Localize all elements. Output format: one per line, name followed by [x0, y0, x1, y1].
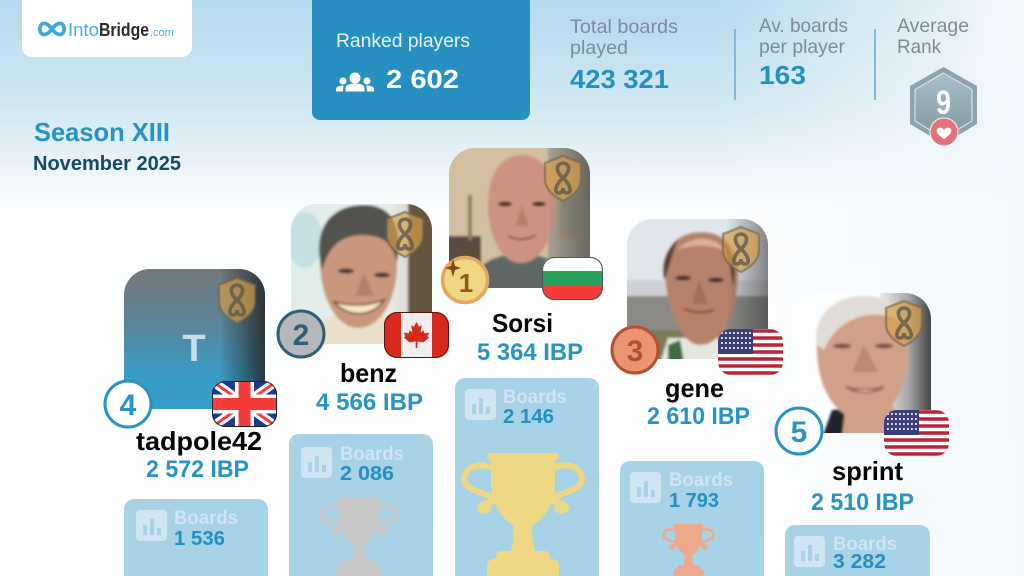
player name: sprint — [832, 456, 903, 486]
stat: total boards — [570, 16, 678, 94]
player name: tadpole42 — [136, 426, 262, 456]
stat: total boards: Total boards — [570, 16, 678, 38]
icon: gold trophy — [464, 453, 582, 576]
icon: silver trophy — [322, 498, 396, 576]
flag: United Kingdom — [212, 381, 277, 427]
boards panel — [620, 461, 764, 576]
rank badge 1 — [442, 258, 488, 302]
avatar — [124, 269, 265, 409]
stat: average boards: Av. boards — [759, 15, 848, 37]
boards panel — [785, 525, 930, 576]
rank badge 2 — [278, 311, 324, 357]
stat: average boards: per player — [759, 36, 845, 58]
IBP score: 2 572 IBP — [146, 456, 249, 483]
label: ranked players: Ranked players — [336, 30, 470, 52]
photo — [627, 219, 768, 359]
rank badge 1: 1 — [459, 268, 473, 298]
icon: bronze trophy — [664, 524, 713, 576]
panel: ranked players — [312, 0, 530, 120]
stat: total boards: played — [570, 37, 628, 59]
rank badge 4: 4 — [120, 389, 137, 422]
stat: total boards: 423 321 — [570, 64, 669, 94]
boards panel: Boards — [340, 444, 404, 465]
flag: United States — [884, 410, 949, 456]
boards panel — [455, 378, 599, 576]
rank badge 3: 3 — [627, 335, 643, 368]
avatar initial: T — [182, 328, 206, 370]
boards panel: Boards — [503, 387, 567, 408]
flag: United States — [718, 329, 783, 375]
player card: gene — [612, 215, 783, 576]
rank badge 5: 5 — [791, 416, 807, 449]
icon: shield badge — [387, 212, 423, 257]
value: ranked players: 2 602 — [386, 64, 459, 94]
rank badge 5 — [776, 408, 822, 454]
IBP score: 5 364 IBP — [477, 339, 583, 366]
boards panel — [289, 434, 433, 576]
logo card — [22, 0, 192, 57]
icon: rank hexagon: 9 — [936, 84, 951, 122]
icon: infinity logo — [40, 24, 64, 34]
stat: average boards — [759, 15, 848, 90]
icon: shield badge — [219, 278, 255, 323]
photo — [449, 148, 590, 288]
rank badge 4 — [105, 381, 151, 427]
heading: date: November 2025 — [33, 153, 181, 175]
icon: people — [336, 72, 374, 92]
player card: benz — [278, 200, 449, 576]
logo text: Bridge — [99, 19, 149, 40]
IBP score: 4 566 IBP — [316, 389, 423, 416]
icon: shield badge — [886, 301, 922, 346]
boards panel: Boards — [669, 470, 733, 491]
boards panel: 1 536 — [174, 528, 225, 550]
stat: average rank — [897, 15, 977, 146]
icon: shield badge — [545, 156, 581, 201]
logo text: Into — [68, 19, 99, 40]
photo — [291, 204, 432, 344]
stat: average rank: Rank — [897, 36, 941, 58]
player card: tadpole42 — [105, 269, 277, 576]
player name: benz — [340, 358, 397, 388]
rank badge 2: 2 — [293, 319, 309, 352]
boards panel: Boards — [833, 534, 897, 555]
flag: Bulgaria — [542, 257, 603, 300]
boards panel: 2 146 — [503, 406, 554, 428]
IBP score: 2 510 IBP — [811, 489, 914, 516]
boards panel: 2 086 — [340, 463, 394, 485]
player name: Sorsi — [492, 308, 553, 338]
rank badge 3 — [612, 327, 658, 373]
heading: season — [33, 117, 181, 175]
player name: gene — [665, 373, 724, 403]
logo text: .com — [150, 27, 174, 39]
player card: sprint — [776, 293, 949, 576]
heading: season: Season XIII — [34, 117, 170, 147]
stat: average boards: 163 — [759, 60, 806, 90]
boards panel: 1 793 — [669, 490, 719, 512]
icon: shield badge — [723, 227, 759, 272]
boards panel: 3 282 — [833, 551, 886, 573]
flag: Canada — [384, 312, 449, 358]
IBP score: 2 610 IBP — [647, 403, 750, 430]
boards panel: Boards — [174, 508, 238, 529]
boards panel — [124, 499, 268, 576]
player card: Sorsi — [442, 144, 603, 576]
stat: average rank: Average — [897, 15, 969, 37]
photo — [815, 293, 931, 433]
